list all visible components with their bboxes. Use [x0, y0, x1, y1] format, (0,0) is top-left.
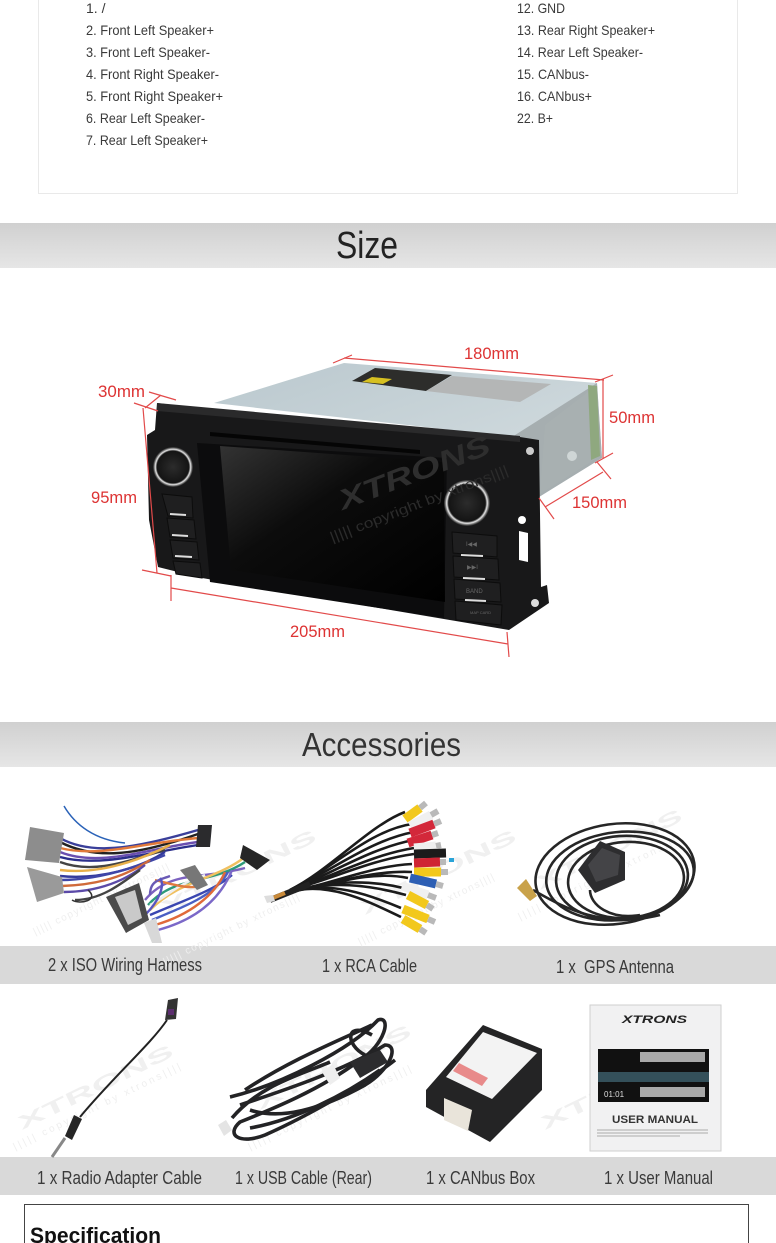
- panel: specification: [24, 1204, 748, 1243]
- knobs: [153, 447, 490, 526]
- pin list: left column: 3. Front Left Speaker-: [86, 44, 210, 60]
- accessory watermarks: ||||| copyright by xtrons||||: [11, 1062, 183, 1153]
- labels: row 1: 1 x RCA Cable: [322, 956, 417, 976]
- accessory watermarks: XTRONS: [533, 805, 686, 894]
- pin list: right column: 22. B+: [517, 110, 553, 126]
- pin list: left column: 4. Front Right Speaker-: [86, 66, 219, 82]
- heading: Accessories: [0, 722, 776, 767]
- cable bundle: [290, 812, 414, 917]
- right buttons: [452, 532, 502, 625]
- dimension lines: [134, 355, 613, 657]
- accessory watermarks: XTRONS: [253, 1021, 415, 1114]
- labels: row 1: 2 x ISO Wiring Harness: [48, 955, 202, 975]
- pin list: left column: [86, 0, 223, 148]
- accessory watermarks: ||||| copyright by xtrons||||: [31, 862, 171, 938]
- RCA plug tips: [420, 803, 448, 933]
- RCA plugs: [402, 808, 446, 929]
- dimension labels: [91, 344, 655, 641]
- accessory: radio adapter cable: [52, 998, 178, 1157]
- accessory: USB cable: [218, 1019, 395, 1139]
- pin list: left column: 2. Front Left Speaker+: [86, 22, 214, 38]
- connectors: [25, 827, 64, 863]
- wires: [60, 806, 245, 930]
- accessory: user manual: [590, 1005, 721, 1151]
- watermark: XTRONS: [331, 429, 495, 517]
- faceplate: [147, 403, 549, 630]
- labels: row 2: 1 x User Manual: [604, 1168, 713, 1188]
- button icons: MAP CARD: [470, 610, 491, 615]
- label band: row 2: [0, 1157, 776, 1195]
- pin list: right column: 12. GND: [517, 0, 565, 16]
- button icons: [466, 542, 491, 615]
- pin list: left column: 7. Rear Left Speaker+: [86, 132, 208, 148]
- dimension labels: 150mm: [572, 493, 627, 512]
- accessory watermarks: ||||| copyright by xtrons||||: [246, 1064, 413, 1153]
- dimension labels: 180mm: [464, 344, 519, 363]
- panel: pin list: [38, 0, 738, 194]
- accessory watermarks: ||||| copyright by xtrons||||: [356, 872, 496, 948]
- accessory: GPS antenna: [517, 813, 701, 935]
- pin list: left column: 1. /: [86, 0, 106, 16]
- pin list: right column: 15. CANbus-: [517, 66, 589, 82]
- dimension labels: 50mm: [609, 408, 655, 427]
- accessory: user manual: 01:01: [604, 1090, 625, 1099]
- product photo: head unit with dimensions: [91, 344, 655, 657]
- accessory watermarks: ||||| copyright by xtrons||||: [516, 834, 683, 923]
- pin list: right column: [517, 0, 655, 126]
- label band: row 1: [0, 946, 776, 984]
- pin list: left column: 6. Rear Left Speaker-: [86, 110, 205, 126]
- button icons: BAND: [466, 589, 483, 595]
- pin list: left column: 5. Front Right Speaker+: [86, 88, 223, 104]
- accessory watermarks: XTRONS: [358, 826, 520, 919]
- mounting holes: [526, 447, 534, 455]
- accessory watermarks: [11, 805, 700, 1153]
- antenna puck: [578, 841, 625, 893]
- labels: row 2: 1 x Radio Adapter Cable: [37, 1168, 202, 1188]
- pin list: right column: 14. Rear Left Speaker-: [517, 44, 643, 60]
- heading: Size: Size: [336, 225, 398, 267]
- accessory watermarks: ||||| copyright by xtrons||||: [161, 892, 301, 968]
- heading: Accessories: Accessories: [302, 726, 461, 763]
- dimension labels: 95mm: [91, 488, 137, 507]
- button icons: ▶▶I: [467, 565, 478, 571]
- labels: row 2: 1 x CANbus Box: [426, 1168, 535, 1188]
- dimension labels: 30mm: [98, 382, 145, 401]
- watermark copyright: ||||| copyright by xtrons||||: [327, 462, 510, 545]
- left buttons: [162, 494, 202, 578]
- pin list: right column: 16. CANbus+: [517, 88, 592, 104]
- screen bezel and screen: [197, 443, 447, 618]
- accessory: user manual: XTRONS: [621, 1014, 688, 1026]
- gold connector: [517, 879, 537, 901]
- accessory: wiring harness: [25, 806, 270, 943]
- accessory: user manual: USER MANUAL: [612, 1114, 698, 1126]
- accessory watermarks: XTRONS: [15, 1041, 177, 1134]
- disc slot: [210, 432, 420, 454]
- chassis: [214, 363, 602, 497]
- labels: row 1: [48, 955, 675, 977]
- accessory: RCA cable: [264, 803, 454, 933]
- accessory: CANbus box: [426, 1025, 542, 1142]
- accessory watermarks: XTRONS: [538, 1041, 700, 1134]
- button icons: I◀◀: [466, 542, 477, 548]
- labels: row 2: 1 x USB Cable (Rear): [235, 1168, 372, 1188]
- labels: row 1: 1 x GPS Antenna: [556, 957, 675, 977]
- heading: Size: [0, 223, 776, 268]
- labels: row 2: [37, 1168, 713, 1188]
- pin list: right column: 13. Rear Right Speaker+: [517, 22, 655, 38]
- dimension labels: 205mm: [290, 622, 345, 641]
- accessory watermarks: XTRONS: [158, 826, 320, 919]
